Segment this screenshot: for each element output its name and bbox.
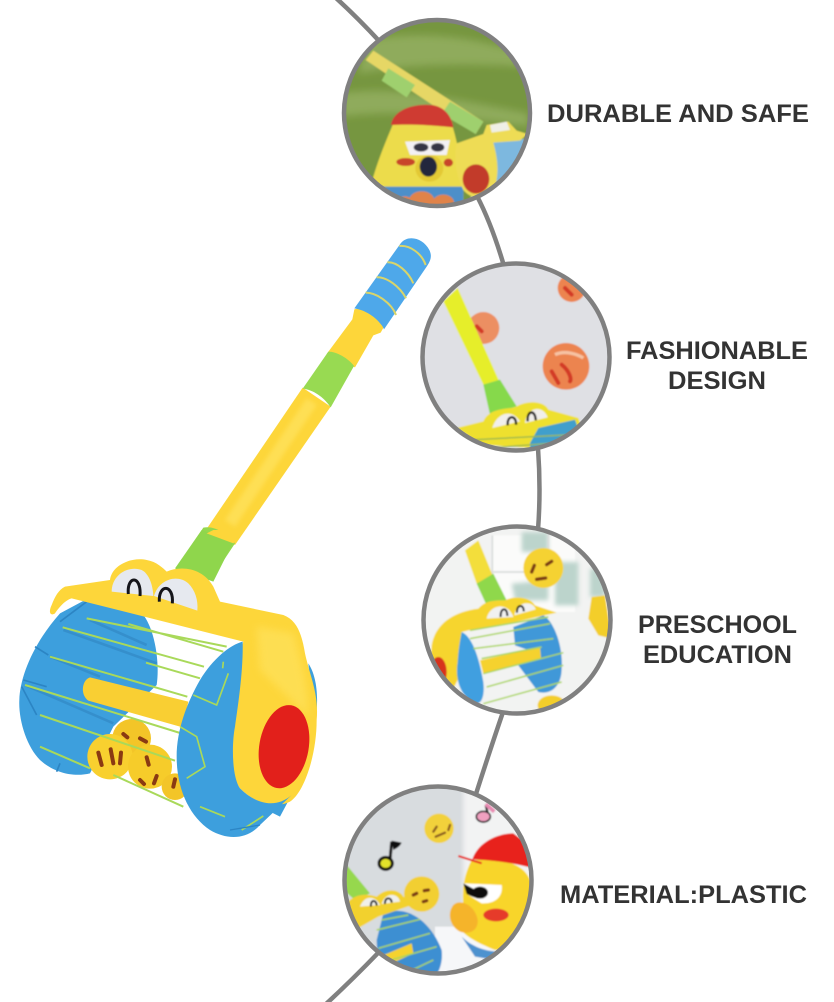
handle blue grip bbox=[354, 238, 431, 329]
yellow mini head bbox=[457, 402, 582, 448]
mini front wheel bbox=[457, 632, 484, 703]
label: fashionable design: DESIGN bbox=[668, 367, 766, 395]
yellow axle bbox=[83, 677, 188, 727]
toy handle bbox=[175, 238, 431, 570]
back wheel bbox=[19, 600, 158, 775]
outdoor handle bbox=[365, 50, 480, 120]
yellow balls bbox=[404, 814, 454, 912]
handle lower yellow tube bbox=[208, 388, 331, 545]
yellow pole bbox=[465, 540, 493, 584]
circle rings bbox=[344, 20, 610, 974]
handle middle green collar bbox=[303, 352, 354, 407]
bottom ball bbox=[536, 694, 563, 709]
mini wheel bbox=[528, 418, 578, 448]
circle 2: fashionable design bbox=[424, 266, 608, 448]
circle 4: material plastic bbox=[346, 788, 530, 972]
character body bbox=[372, 124, 462, 188]
label: durable and safe: DURABLE AND SAFE bbox=[547, 100, 809, 128]
connector arc bbox=[326, 0, 540, 1002]
character cap bbox=[472, 833, 530, 867]
yellow balls bbox=[87, 719, 188, 800]
background bbox=[443, 278, 590, 448]
character cap bbox=[391, 105, 453, 127]
blue edge behind side plate bbox=[267, 663, 317, 817]
character body bbox=[458, 860, 534, 950]
label: preschool education: PRESCHOOL bbox=[638, 611, 797, 639]
green rods bbox=[25, 618, 227, 807]
front wheel bbox=[177, 642, 292, 837]
yellow frame bbox=[50, 559, 317, 805]
mini head frame bbox=[430, 598, 557, 692]
outdoor toy head bbox=[470, 180, 498, 198]
character eyes and nose bbox=[396, 140, 453, 182]
label: material plastic: MATERIAL:PLASTIC bbox=[560, 881, 807, 909]
red button bbox=[434, 656, 448, 678]
mini back wheel bbox=[513, 615, 562, 693]
mini axle bbox=[480, 647, 541, 674]
label: preschool education: EDUCATION bbox=[643, 641, 792, 669]
wall background bbox=[348, 792, 530, 972]
toy head with wheels bbox=[19, 530, 317, 837]
green neck bbox=[175, 530, 233, 582]
music notes bbox=[379, 804, 494, 869]
mini head bbox=[349, 890, 410, 928]
mini rods bbox=[470, 617, 563, 704]
orange balls bbox=[409, 190, 435, 204]
right character bbox=[588, 595, 612, 639]
room window background bbox=[430, 530, 608, 708]
circle 1: durable and safe bbox=[346, 22, 528, 204]
circle 3: preschool education bbox=[426, 529, 608, 711]
label: fashionable design bbox=[626, 337, 808, 395]
red button bbox=[252, 701, 316, 792]
orange balls bbox=[467, 274, 589, 390]
yellow pole bbox=[443, 288, 500, 385]
label: fashionable design: FASHIONABLE bbox=[626, 337, 808, 365]
handle lower green collar bbox=[175, 527, 235, 570]
label: preschool education bbox=[638, 611, 797, 669]
green pole stub bbox=[346, 866, 370, 899]
mini wheel bbox=[377, 911, 442, 980]
flying yellow ball bbox=[523, 548, 563, 588]
green collar bbox=[477, 574, 507, 605]
green collar bbox=[483, 380, 517, 415]
handle upper yellow tube bbox=[327, 309, 384, 367]
grass background bbox=[346, 22, 528, 200]
eyes bbox=[112, 569, 198, 611]
character face bbox=[450, 883, 509, 933]
